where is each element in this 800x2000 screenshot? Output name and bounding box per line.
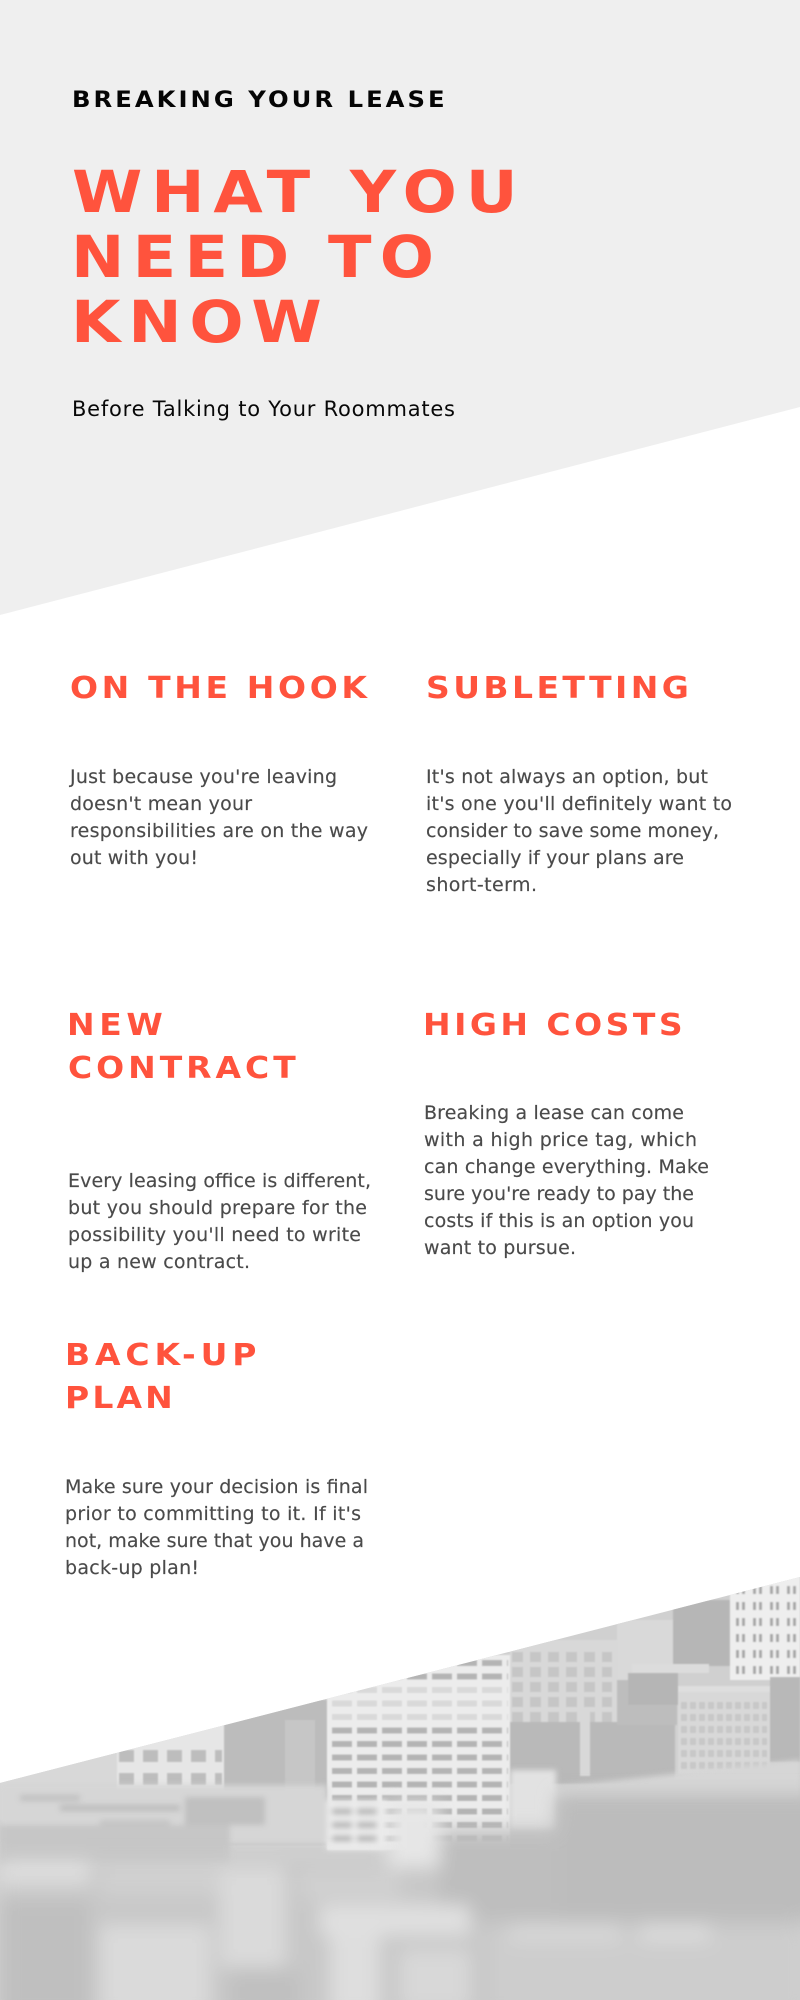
text block: New Contract body: Every leasing office is different,: [68, 1170, 371, 1192]
panel: Subletting: [426, 671, 732, 896]
panel: High Costs: [423, 1008, 709, 1259]
text block: High Costs body: can change everything. Make: [424, 1156, 709, 1178]
subtitle: Before Talking to Your Roommates: [72, 397, 455, 421]
text block: High Costs body: sure you're ready to pay the: [424, 1183, 694, 1205]
text block: Subletting body: consider to save some money,: [426, 820, 719, 842]
title: What You Need To Know: NEED TO: [71, 224, 434, 291]
text block: Back-Up Plan body: not, make sure that you have a: [65, 1530, 364, 1552]
text block: On the Hook body: responsibilities are on the way: [70, 820, 368, 842]
text block: High Costs body: Breaking a lease can come: [424, 1102, 684, 1124]
heading: New Contract: NEW: [67, 1008, 163, 1043]
kicker: Breaking Your Lease: BREAKING YOUR LEASE: [72, 86, 445, 113]
heading: On the Hook: ON THE HOOK: [70, 671, 369, 706]
panel: grey header background: [0, 0, 800, 615]
text block: Back-Up Plan body: prior to committing to it. If it's: [65, 1503, 361, 1525]
heading: Subletting: SUBLETTING: [426, 671, 689, 706]
text block: Back-Up Plan body: back-up plan!: [65, 1557, 199, 1579]
heading: Back-Up Plan: PLAN: [65, 1381, 173, 1416]
heading: New Contract: [67, 1008, 296, 1086]
text block: New Contract body: up a new contract.: [68, 1251, 250, 1273]
text block: Subletting body: short-term.: [426, 874, 537, 896]
text block: On the Hook body: Just because you're leaving: [69, 766, 337, 788]
heading: New Contract: CONTRACT: [68, 1051, 296, 1086]
panel: On the Hook: [69, 671, 369, 869]
image: blurred grey city skyline: [0, 1570, 800, 2000]
text block: Subletting body: it's one you'll definitely want to: [426, 793, 732, 815]
text block: High Costs body: costs if this is an option you: [424, 1210, 694, 1232]
text block: On the Hook body: out with you!: [70, 847, 198, 869]
text block: On the Hook body: [69, 766, 368, 869]
text block: High Costs body: want to pursue.: [424, 1237, 576, 1259]
text block: Back-Up Plan body: [65, 1476, 368, 1579]
text block: Subletting body: especially if your plans are: [426, 847, 684, 869]
text block: Subletting body: It's not always an option, but: [426, 766, 708, 788]
text block: Back-Up Plan body: Make sure your decision is final: [65, 1476, 368, 1498]
heading: High Costs: HIGH COSTS: [423, 1008, 683, 1043]
text block: High Costs body: with a high price tag, which: [424, 1129, 697, 1151]
title: What You Need To Know: KNOW: [71, 289, 322, 356]
text block: Subletting body: [426, 766, 732, 896]
text block: On the Hook body: doesn't mean your: [70, 793, 252, 815]
text block: New Contract body: [68, 1170, 371, 1273]
panel: Back-Up Plan: [65, 1338, 368, 1579]
heading: Back-Up Plan: [65, 1338, 256, 1416]
heading: Back-Up Plan: BACK-UP: [65, 1338, 256, 1373]
panel: New Contract: [67, 1008, 371, 1273]
title: What You Need To Know: WHAT YOU: [72, 159, 518, 226]
text block: New Contract body: possibility you'll need to write: [68, 1224, 361, 1246]
text block: High Costs body: [424, 1102, 709, 1259]
text block: New Contract body: but you should prepare for the: [68, 1197, 367, 1219]
title: What You Need To Know: [71, 159, 518, 356]
